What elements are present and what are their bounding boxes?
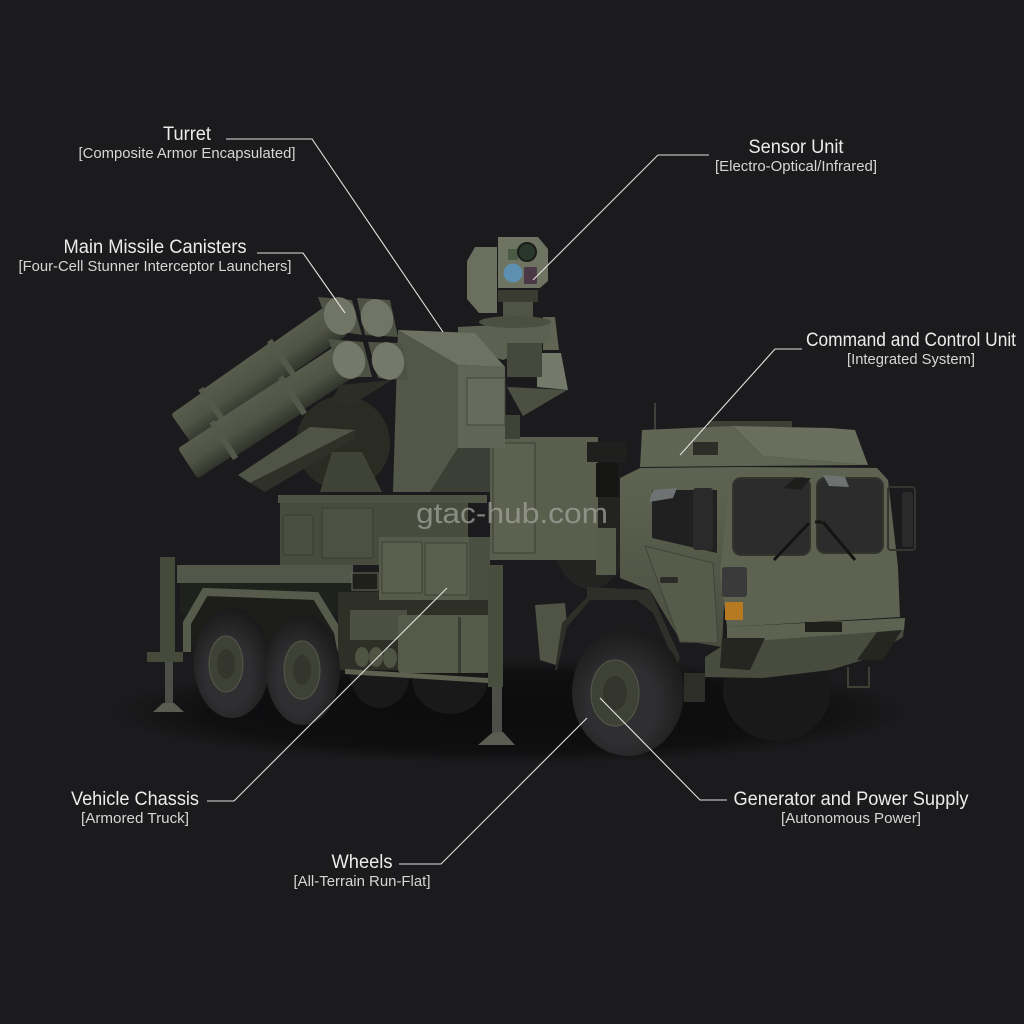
door panel [645,546,718,643]
truck illustration [147,237,915,756]
sensor unit [467,237,551,328]
rear wheel two [266,615,340,725]
lower canister [176,342,359,482]
turret base [278,495,487,565]
callout: Vehicle Chassis [71,588,447,827]
sensor mast [458,317,568,439]
rear jack [147,557,184,712]
callout: Vehicle Chassis: [Armored Truck] [81,810,189,827]
launcher bracket [238,427,355,483]
callout: Wheels: [All-Terrain Run-Flat] [294,873,430,890]
callout: Generator and Power Supply: [Autonomous Power] [781,810,921,827]
front wheel [572,628,684,756]
callout: Main Missile Canisters: Main Missile Canisters [64,237,246,258]
wipers [774,522,855,560]
callout: Turret [78,124,443,332]
cab [620,467,915,702]
callout: Turret: [Composite Armor Encapsulated] [78,145,296,162]
headlight housing [722,567,747,597]
fuel tank [345,615,490,683]
cab side panel [620,467,743,647]
side jack [478,565,515,745]
flatbed and chassis [177,565,488,670]
pivot drum [296,396,390,492]
upper canister [169,302,350,447]
sun visors [649,488,677,502]
rear support canister [330,380,392,406]
ground shadow [110,660,910,764]
callout: Wheels: Wheels [332,852,392,873]
callout: Generator and Power Supply: Generator and Power Supply [734,789,969,810]
callout: Turret: Turret [163,124,212,145]
steps [684,673,705,702]
far-side wheels [350,636,831,741]
wheels [194,608,684,756]
windscreens [733,478,810,555]
callout: Wheels [294,718,587,890]
side mirror [693,488,713,550]
front fender [535,587,680,670]
callout: Sensor Unit [533,137,877,280]
callout: Command and Control Unit: [Integrated System] [847,351,975,368]
canister caps [318,294,408,383]
callout: Sensor Unit: [Electro-Optical/Infrared] [715,158,877,175]
watermark: gtac-hub.com [416,498,608,530]
callout: Vehicle Chassis: Vehicle Chassis [71,789,199,810]
callout: Generator and Power Supply [600,698,969,827]
cab front panel [720,467,900,627]
equipment cabinet [379,537,490,600]
spare tyre [552,477,628,589]
callout: Command and Control Unit [680,330,1017,455]
callout: Sensor Unit: Sensor Unit [748,137,844,158]
right mirror [888,487,915,550]
missile canisters [169,294,408,492]
callout: Main Missile Canisters [18,237,345,313]
turret body [393,330,505,492]
rear wheel one [194,608,270,718]
side window [652,490,717,553]
indicator lamp [725,602,743,620]
cab roof module [640,403,868,467]
rear equipment cabin [490,437,627,575]
callout: Main Missile Canisters: [Four-Cell Stunner Interceptor Launchers] [18,258,292,275]
bumper [705,618,905,678]
